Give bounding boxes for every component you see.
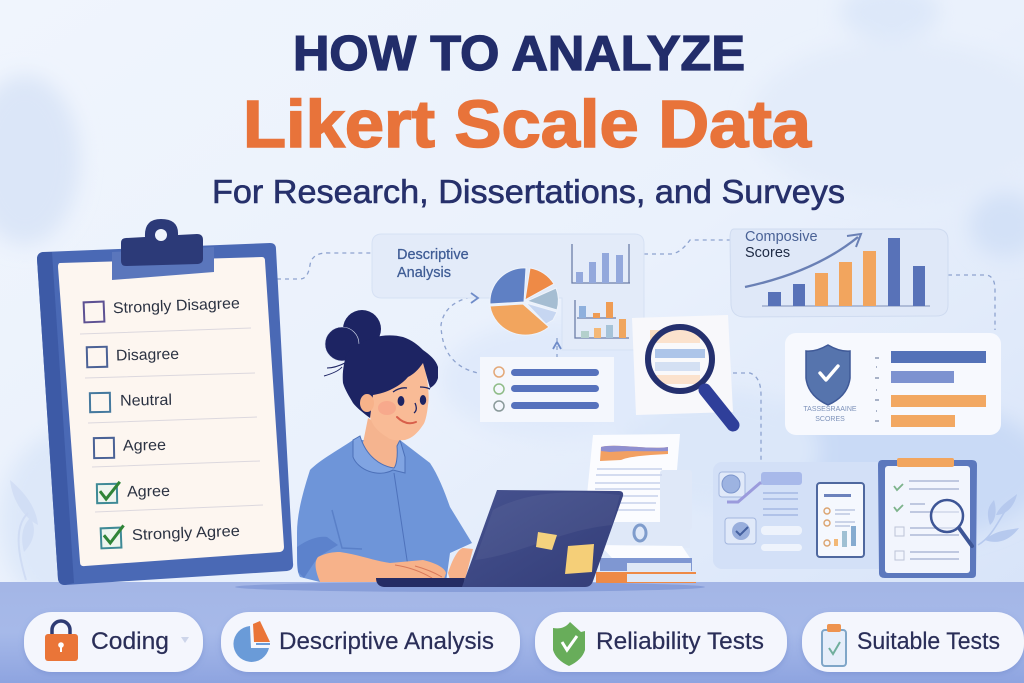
panel: composite scores [730,229,948,317]
option: agree checked: Agree [127,483,170,501]
forearm and hands [316,552,446,582]
clipboard clip [112,219,214,280]
hair buns [343,310,381,348]
connector dashed lines [277,240,995,470]
shield caption: SCORES [815,416,845,423]
panel: report document [584,434,692,548]
pill: coding [24,612,203,672]
option: agree checked [97,481,170,503]
eyes [398,396,404,406]
hair strand [324,363,345,376]
pill: descriptive analysis [221,612,520,672]
neck [363,418,403,470]
panel: likert clipboard [37,219,293,585]
panel: checklist card [480,357,614,422]
arrow: to pie chart [471,293,561,349]
shield caption: TASSESRAAINE [803,406,857,413]
option: disagree [87,345,179,367]
shirt [297,440,472,582]
option: agree unchecked [94,437,166,458]
panel: process flow [713,462,899,569]
trend arrow [745,234,861,287]
pie chart [490,268,558,335]
label: Suitable Tests [857,628,1000,655]
icon: book stack [596,545,696,583]
panel: magnifier card [632,315,733,425]
icon: clipboard check [822,624,846,666]
icon: small magnifier [931,500,972,546]
composite heading: Composive [745,229,818,245]
cheek [378,401,396,415]
face [362,360,429,440]
option: neutral [90,392,172,412]
icon: magnifying glass [648,327,733,425]
bar chart top [572,244,630,283]
horizontal bars [875,351,986,427]
heading line 1: HOW TO ANALYZE [293,27,745,81]
laptop base [376,578,465,587]
icon: phone checklist [817,483,864,557]
option: strongly agree checked [101,521,240,548]
option: disagree: Disagree [116,346,179,364]
panel: reliability scores [785,333,1001,435]
composite heading second line: Scores [745,245,790,261]
desk shadow [235,582,705,592]
foliage right [978,494,1019,545]
illustration: woman at laptop [235,310,705,592]
sticky note large [565,544,594,574]
foliage left [10,480,38,580]
label: Coding [91,628,169,655]
label: Descriptive Analysis [279,628,494,655]
option dividers [80,328,263,512]
option: strongly agree checked: Strongly Agree [132,523,240,544]
option: strongly disagree [84,295,240,322]
icon: green shield [553,622,585,666]
desk floor [0,582,1024,683]
heading line 2: Likert Scale Data [243,87,812,162]
title [212,27,845,210]
icon: padlock [45,621,78,661]
pills row [24,612,1024,672]
pill: reliability tests [535,612,787,672]
laptop screen [462,490,623,587]
descriptive heading: Descriptive [397,247,469,263]
option: strongly disagree: Strongly Disagree [113,295,240,317]
hair [343,335,438,418]
subtitle: For Research, Dissertations, and Surveys [212,173,845,210]
clipboard board [37,243,293,585]
bar chart bottom [575,300,629,338]
icon: shield [806,345,850,405]
ear [360,394,374,412]
descriptive heading: Analysis [397,265,451,281]
descriptive label card [372,234,644,350]
option: neutral: Neutral [120,392,172,410]
sticky note small [536,532,557,550]
clipboard paper [58,257,284,566]
pill: suitable tests [802,612,1024,672]
panel: descriptive analysis [372,234,644,350]
brows and nose [393,387,430,413]
right eye [420,395,426,405]
composite bar chart [762,238,930,306]
option: agree unchecked: Agree [123,437,166,455]
collar [353,436,405,473]
likert options [84,295,240,548]
smile [397,417,416,423]
label: Reliability Tests [596,628,764,655]
sleeve shade [297,537,338,578]
panel: clipboard with search [878,458,977,578]
icon: pie [233,621,270,662]
